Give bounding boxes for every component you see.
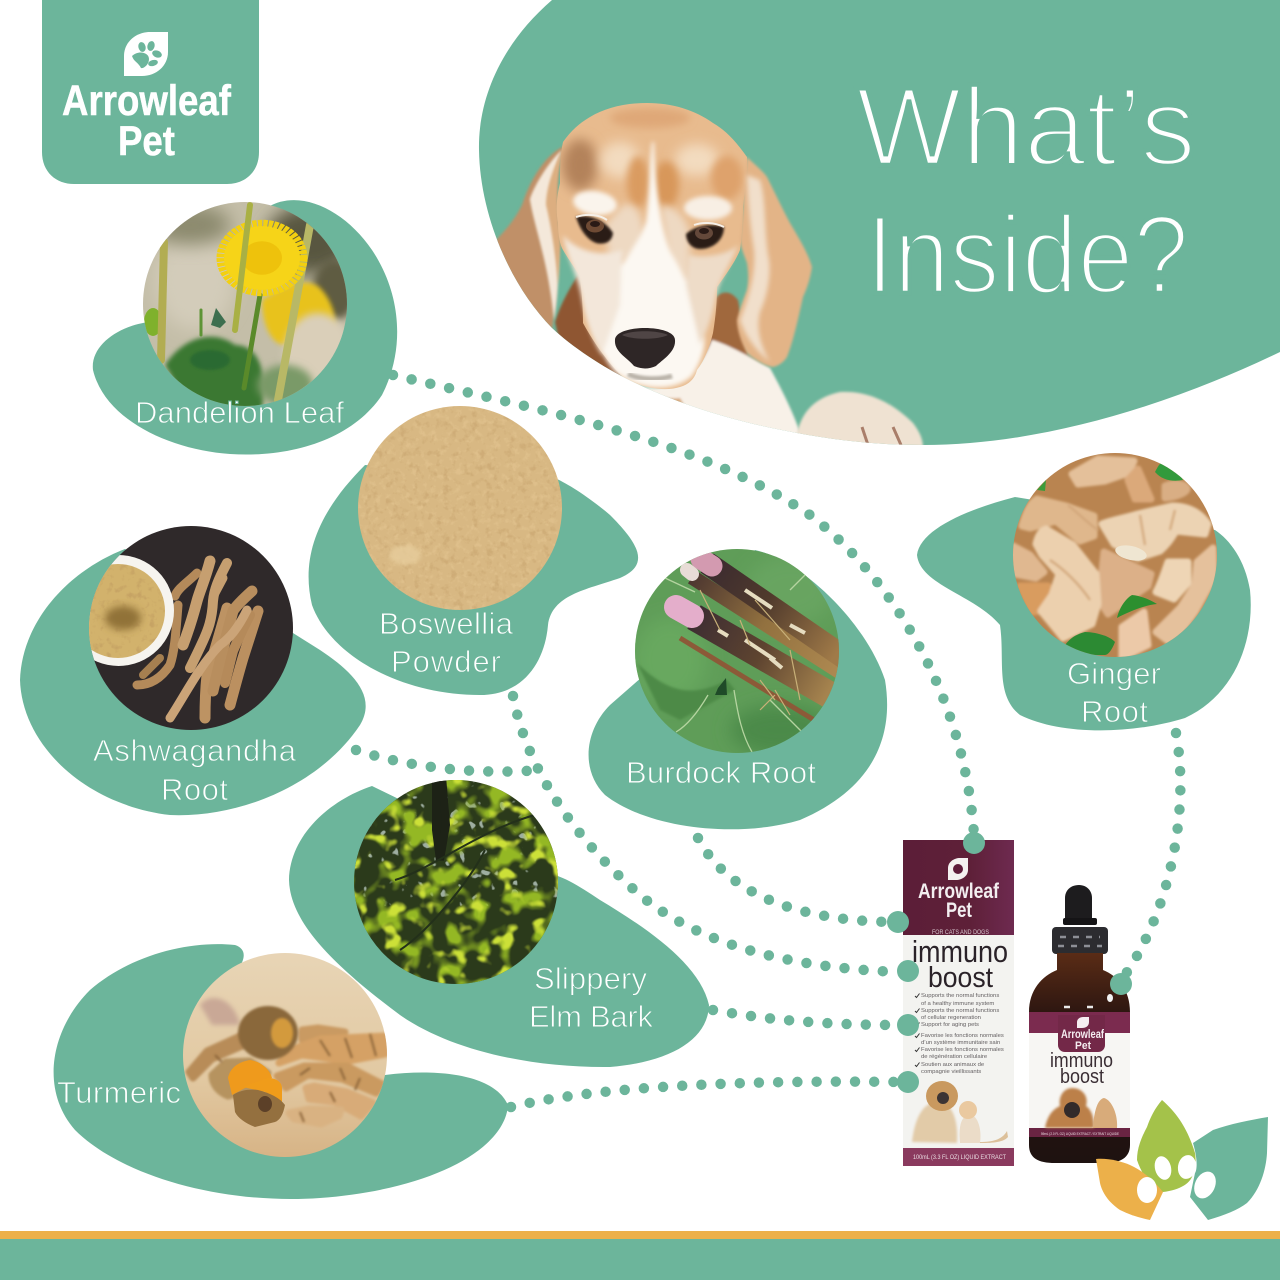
panel: dandelion leaf (93, 200, 397, 455)
dog nose (615, 328, 675, 379)
header blob (479, 0, 1280, 445)
box benefit list: Favorise les fonctions normales (921, 1047, 1004, 1053)
illustration: beagle dog (493, 103, 923, 447)
box benefit list: de régénération cellulaire (921, 1054, 988, 1060)
panel: ashwagandha root (20, 522, 366, 815)
dog right ear (737, 157, 812, 367)
box benefit list: Soutien aux animaux de (921, 1062, 985, 1068)
panel: burdock root (589, 546, 887, 829)
bottle label: Arrowleaf (1061, 1027, 1105, 1041)
box benefit list: Supports the normal functions (921, 993, 999, 999)
product: carton box (903, 840, 1014, 1166)
box pet photo (912, 1081, 1008, 1143)
box benefit list: d’un système immunitaire sain (921, 1040, 1000, 1046)
dog white facial markings (563, 142, 738, 388)
footer band (0, 1231, 1280, 1280)
box benefit list: Favorise les fonctions normales (921, 1033, 1004, 1039)
box product name: boost (928, 962, 993, 994)
label: Elm Bark (529, 999, 654, 1034)
box benefit list: Support for aging pets (921, 1022, 979, 1028)
box product name: immuno (912, 934, 1008, 969)
ginger leaves (1155, 463, 1183, 481)
box product name (912, 934, 1008, 994)
label: Turmeric (57, 1075, 181, 1110)
bottle label: boost (1060, 1066, 1104, 1088)
box benefit list: Supports the normal functions (921, 1008, 999, 1014)
dog neck and chest (555, 275, 800, 445)
bottle label: immuno (1050, 1050, 1113, 1072)
root caps (676, 559, 712, 616)
box benefit list: of a healthy immune system (921, 1001, 994, 1007)
bottle cap (1052, 885, 1108, 954)
label: Slippery (534, 961, 648, 996)
box logo: Pet (946, 899, 972, 922)
icon: leaf with paw (124, 32, 168, 76)
label: Powder (391, 644, 501, 679)
heading: Inside? (866, 193, 1189, 317)
label (529, 961, 654, 1034)
box benefit list: of cellular regeneration (921, 1015, 981, 1021)
panel: turmeric (54, 944, 508, 1199)
label: Root (161, 772, 228, 807)
bottle label (1029, 1012, 1130, 1137)
box logo (918, 858, 1000, 936)
box benefit list: compagnie vieillissants (921, 1069, 981, 1075)
burdock roots (680, 563, 845, 720)
label (93, 733, 297, 807)
photo: turmeric (180, 950, 392, 1162)
connector end dots (887, 832, 1132, 1093)
photo: ginger (1010, 450, 1222, 662)
box footer text: 100mL (3.3 FL OZ) LIQUID EXTRACT (913, 1154, 1006, 1161)
white bowl (89, 555, 174, 666)
dotted connectors (356, 375, 1180, 1107)
label: Dandelion Leaf (135, 395, 344, 430)
heading (856, 65, 1196, 317)
icon: leaf paw emblem (1096, 1100, 1268, 1220)
bottle label: 59mL (2.0 FL OZ) LIQUID EXTRACT / EXTRAIT LIQUIDE (1041, 1132, 1120, 1136)
logo wordmark (62, 77, 232, 164)
dog fur shading (562, 108, 743, 290)
logo wordmark: Arrowleaf (62, 77, 232, 125)
label: Ashwagandha (93, 733, 297, 768)
label: Ginger (1067, 656, 1161, 691)
label: Boswellia (379, 606, 514, 641)
label (1067, 656, 1161, 729)
product: dropper bottle (1029, 885, 1130, 1163)
dog eyes (576, 215, 724, 249)
heading: What’s (856, 65, 1196, 189)
panel: slippery elm bark (289, 776, 709, 1067)
label: Burdock Root (626, 755, 816, 790)
panel: boswellia powder (309, 403, 638, 695)
box logo: Arrowleaf (918, 880, 1000, 903)
logo wordmark: Pet (118, 117, 175, 164)
box logo: FOR CATS AND DOGS (932, 929, 990, 936)
photo: boswellia powder (355, 403, 565, 613)
photo: slippery elm (350, 776, 562, 988)
logo badge (42, 0, 259, 184)
bottle label: Pet (1075, 1040, 1091, 1052)
photo: dandelion (140, 200, 357, 410)
dog paw (790, 392, 923, 447)
box benefit list (915, 993, 1004, 1075)
roots (137, 561, 258, 718)
dog head (557, 103, 747, 389)
panel: ginger root (917, 450, 1251, 730)
photo: burdock (632, 546, 845, 756)
dog left ear (493, 146, 564, 330)
photo: ashwagandha (89, 526, 293, 730)
label: Root (1081, 694, 1148, 729)
label (379, 606, 514, 679)
